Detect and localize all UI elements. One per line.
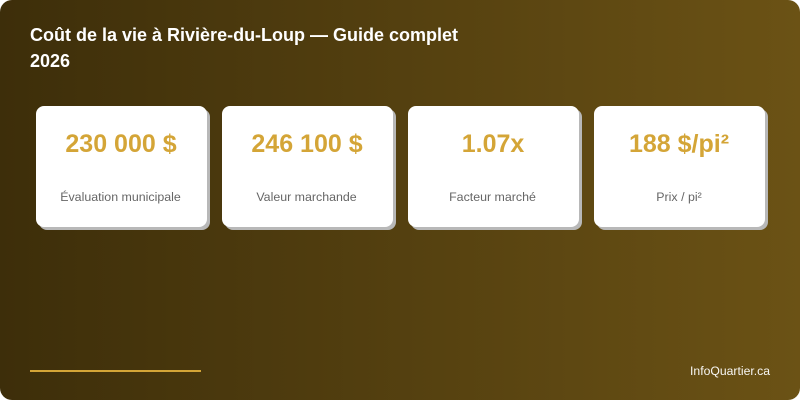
accent line [30,370,201,372]
title: Coût de la vie à Rivière-du-Loup — Guide complet [30,25,458,45]
value: 1.07x: 1.07x [462,130,524,158]
label: prix / pi²: Prix / pi² [656,190,702,204]
panel: facteur marché [408,106,582,230]
panel: prix au pied carré [594,106,768,230]
label: facteur marché: Facteur marché [449,190,536,204]
panel: valeur marchande [222,106,396,230]
label: évaluation municipale: Évaluation municipale [60,189,181,204]
title [30,25,458,71]
label: valeur marchande: Valeur marchande [256,190,357,204]
value: 246 100 $: 246 100 $ [251,130,363,158]
brand: InfoQuartier.ca: InfoQuartier.ca [690,364,770,378]
value: 188 $/pi²: 188 $/pi² [629,130,729,158]
value: 230 000 $: 230 000 $ [65,130,177,158]
title: 2026 [30,51,70,71]
panel: évaluation municipale [36,106,210,230]
